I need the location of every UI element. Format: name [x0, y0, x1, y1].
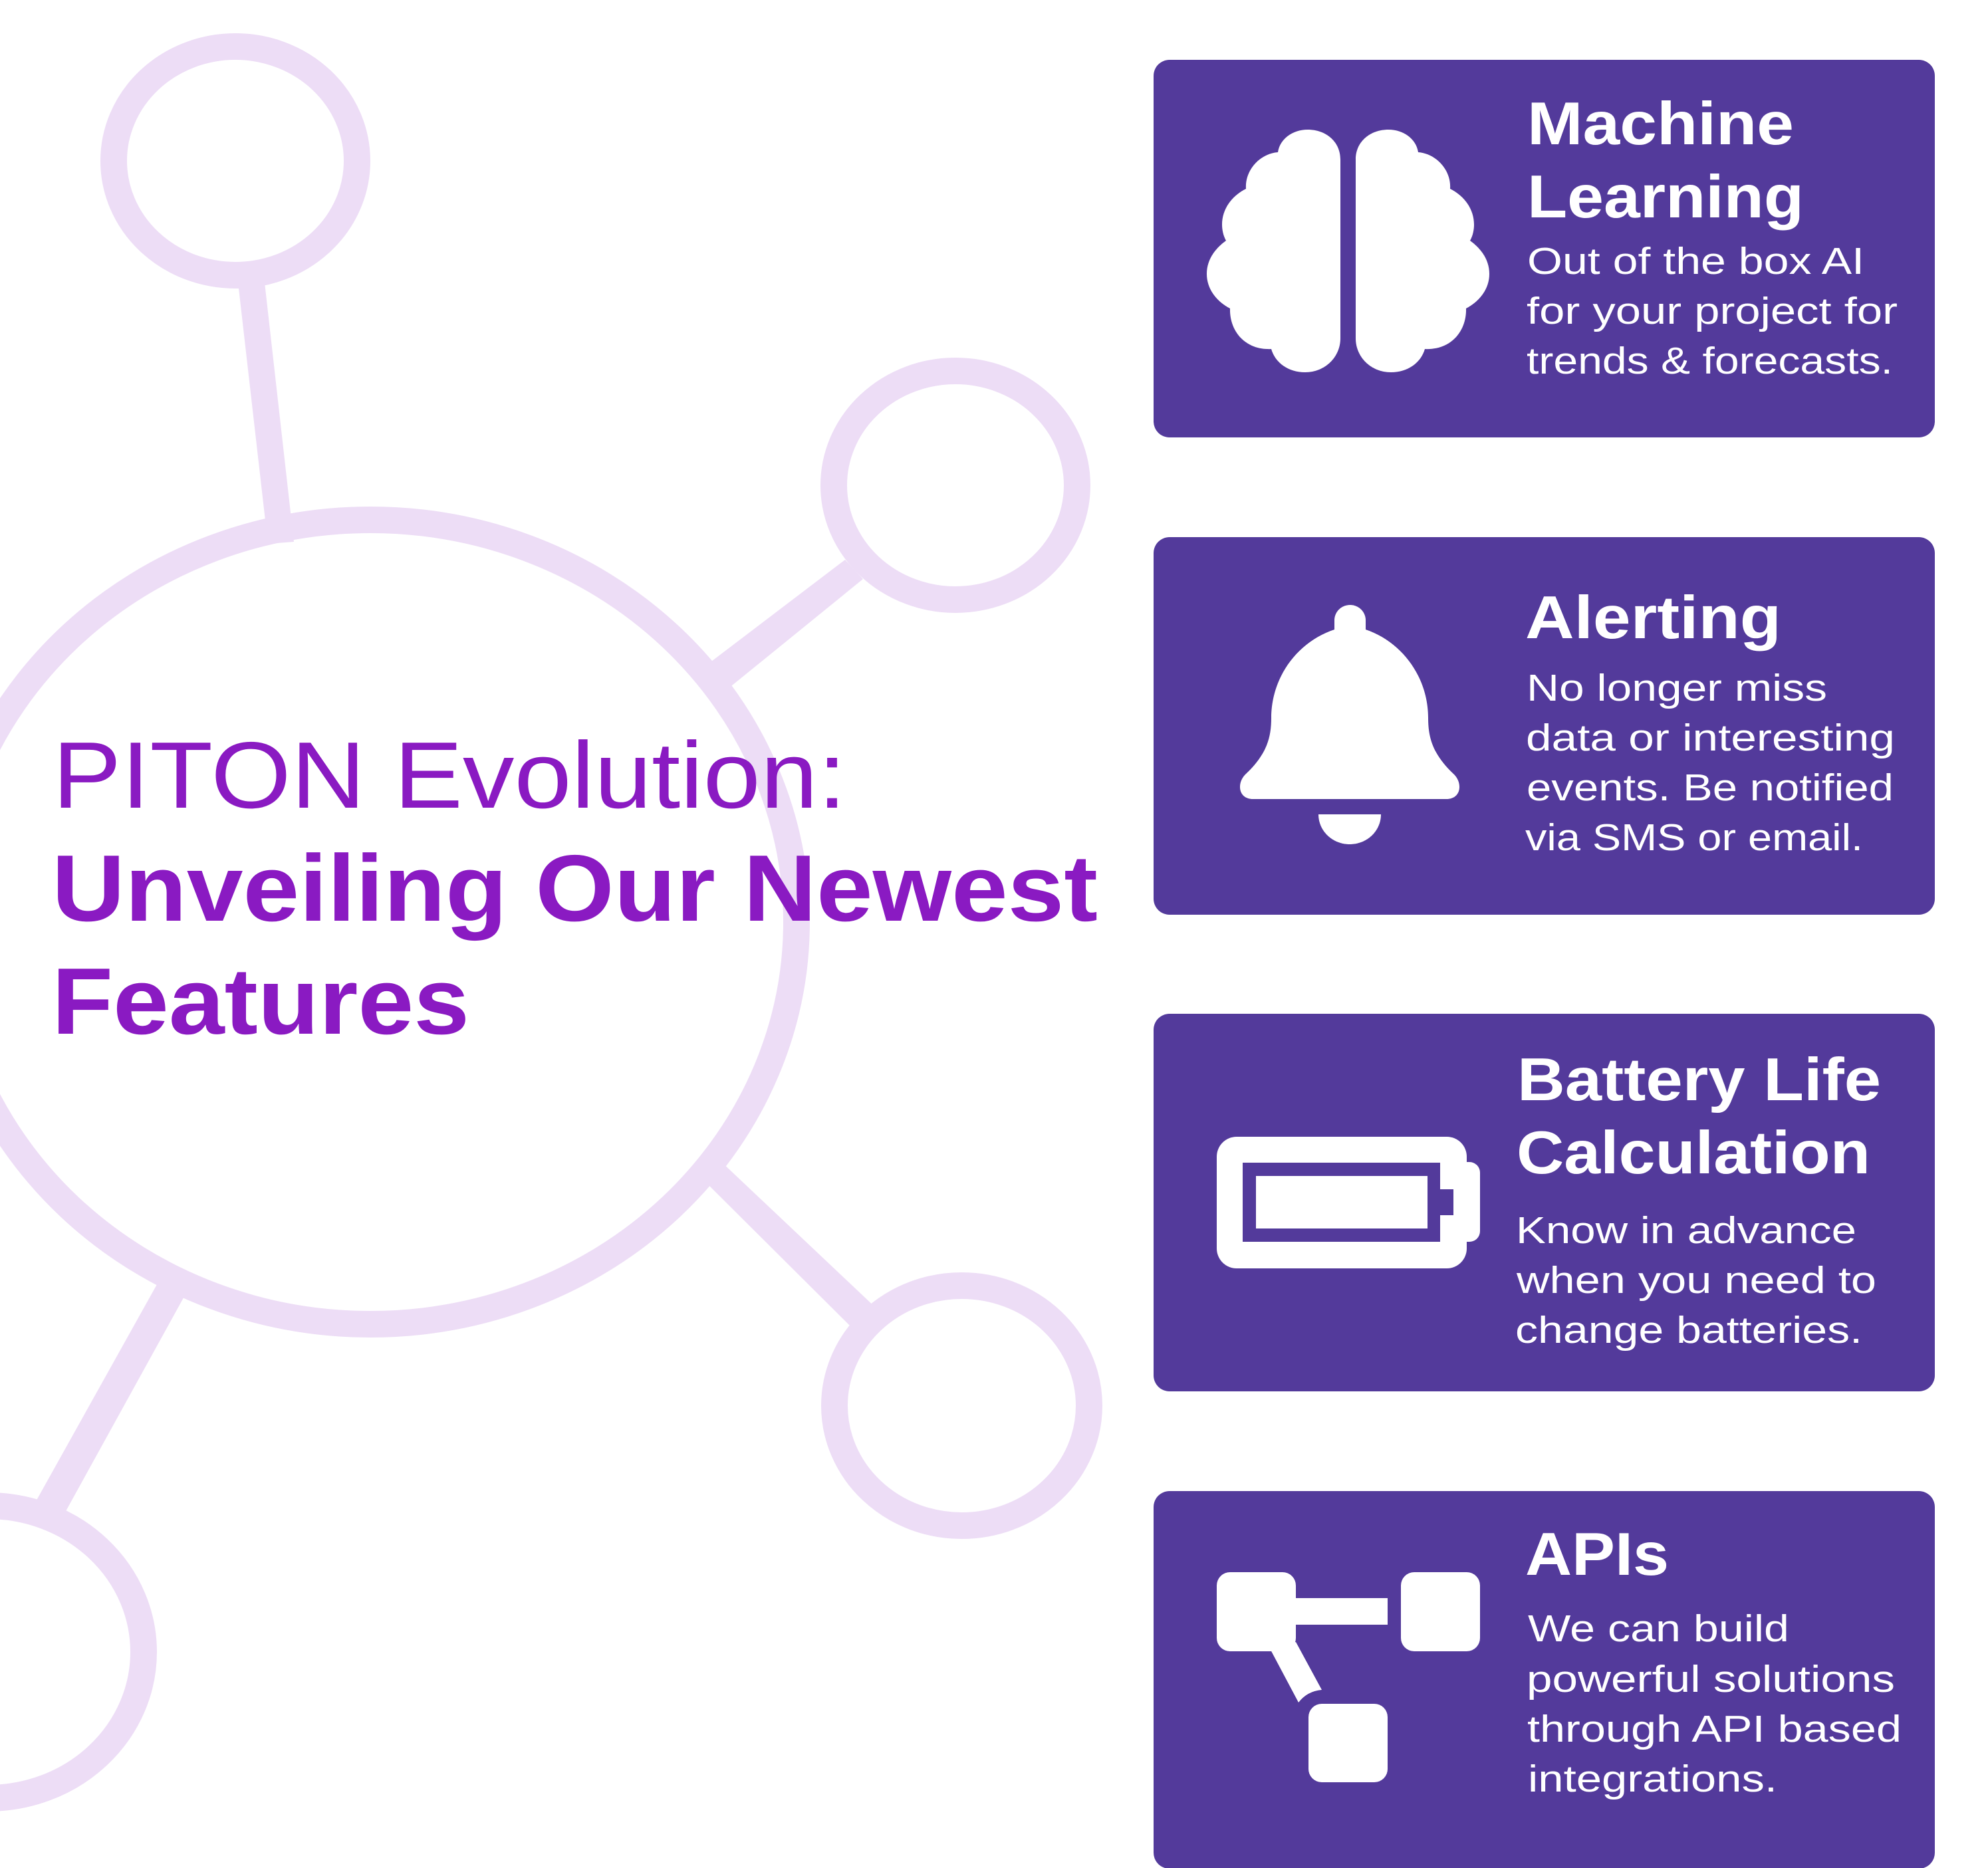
ring: central hub	[0, 520, 797, 1324]
text: battery description	[1515, 1209, 1876, 1351]
text: alerting description: via SMS or email.	[1525, 816, 1863, 859]
connector: hub to bottom left node	[35, 1280, 186, 1512]
panel: APIs	[1154, 1491, 1935, 1868]
text: battery description: change batteries.	[1515, 1309, 1862, 1351]
icon: connected nodes	[1217, 1572, 1480, 1782]
connector: hub to bottom right node	[703, 1160, 876, 1330]
text: APIs description: through API based	[1527, 1708, 1902, 1750]
heading: battery life calculation: Calculation	[1517, 1119, 1870, 1187]
heading: machine learning: Learning	[1527, 164, 1804, 231]
text: APIs description	[1527, 1607, 1902, 1800]
icon: battery	[1217, 1137, 1480, 1268]
network diagram: hub and spoke rings	[0, 47, 1089, 1798]
panel: alerting	[1154, 537, 1935, 915]
title: Unveiling Our Newest	[52, 836, 1098, 941]
connector: hub to top right node	[706, 560, 863, 691]
connector: hub to top left node	[238, 283, 294, 544]
text: alerting description: events. Be notified	[1527, 766, 1894, 809]
title	[52, 723, 1098, 1054]
icon: bell	[1240, 605, 1459, 844]
text: machine learning description: Out of the box AI	[1527, 240, 1864, 283]
title: PITON Evolution:	[53, 723, 846, 828]
heading: battery life calculation: Battery Life	[1517, 1046, 1881, 1113]
ring: top right node	[834, 371, 1077, 600]
ring: bottom right node	[834, 1286, 1089, 1526]
text: battery description: when you need to	[1516, 1259, 1876, 1302]
heading: machine learning	[1527, 90, 1804, 231]
panel: battery life calculation	[1154, 1014, 1935, 1391]
text: APIs description: We can build	[1528, 1607, 1789, 1650]
text: machine learning description: for your project for	[1527, 290, 1898, 332]
text: machine learning description	[1527, 240, 1898, 382]
text: APIs description: powerful solutions	[1527, 1658, 1895, 1700]
text: machine learning description: trends & forecasts.	[1527, 340, 1893, 382]
ring: top left node	[114, 47, 357, 275]
text: alerting description: No longer miss	[1527, 667, 1827, 709]
heading: alerting: Alerting	[1525, 584, 1781, 651]
panel: machine learning	[1154, 60, 1935, 437]
text: battery description: Know in advance	[1516, 1209, 1856, 1252]
icon: brain	[1207, 130, 1489, 372]
text: alerting description	[1525, 667, 1895, 859]
title: Features	[52, 949, 469, 1054]
ring: bottom left node	[0, 1506, 144, 1798]
heading: battery life calculation	[1517, 1046, 1881, 1187]
heading: machine learning: Machine	[1527, 90, 1794, 158]
text: APIs description: integrations.	[1528, 1758, 1777, 1800]
heading: APIs: APIs	[1525, 1521, 1669, 1588]
text: alerting description: data or interesting	[1526, 717, 1895, 759]
